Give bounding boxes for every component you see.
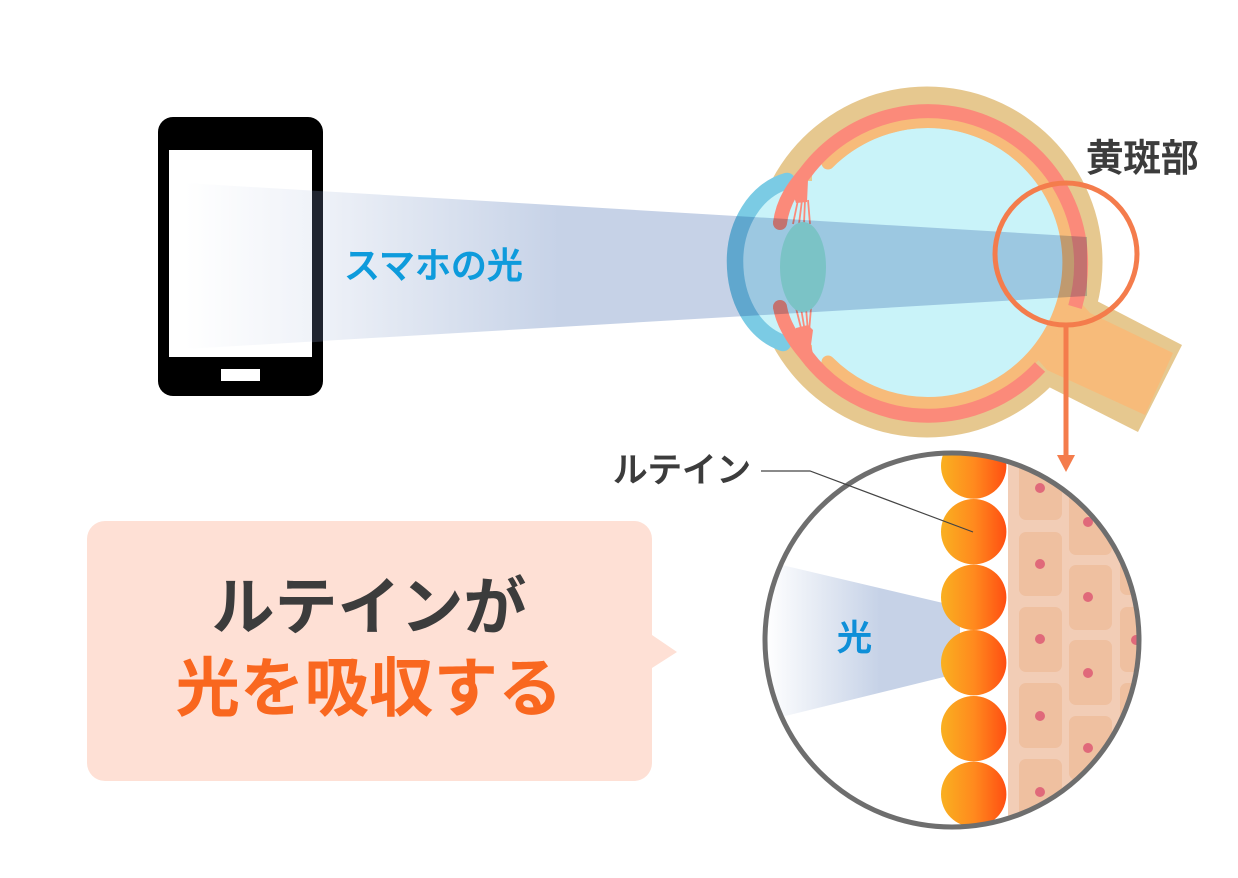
retinal cell layer [1008,464,1136,816]
leader line: lutein [761,471,973,532]
label: macula: 黄斑部 [1086,137,1198,179]
label: smartphone light: スマホの光 [344,245,523,286]
vitreous body [793,128,1063,398]
ciliary body lower [792,308,815,362]
cornea [735,181,787,343]
beam over phone edge [312,191,323,342]
optic nerve core [1025,296,1173,415]
lutein spheres [941,433,1006,827]
arrow to magnified view [1057,325,1075,472]
crystalline lens [780,222,826,312]
callout line 1: ルテインが [212,573,526,643]
label: light in magnified view: 光 [837,619,872,658]
aqueous humor [735,181,815,345]
callout bubble [87,521,677,781]
ciliary body upper [792,165,812,224]
light beam in magnified view [782,566,960,716]
choroid upper [773,111,1081,307]
magnified circle [762,450,1142,830]
callout line 2: 光を吸収する [175,653,563,725]
macula highlight circle [995,183,1137,325]
smartphone icon [158,117,323,396]
light beam from smartphone [185,183,1087,349]
choroid lower [773,300,1040,416]
optic nerve sheath [1045,300,1182,432]
eyeball cross-section [735,86,1182,438]
label: lutein: ルテイン [613,452,751,490]
sclera [752,86,1102,438]
retina layer [828,122,1069,403]
